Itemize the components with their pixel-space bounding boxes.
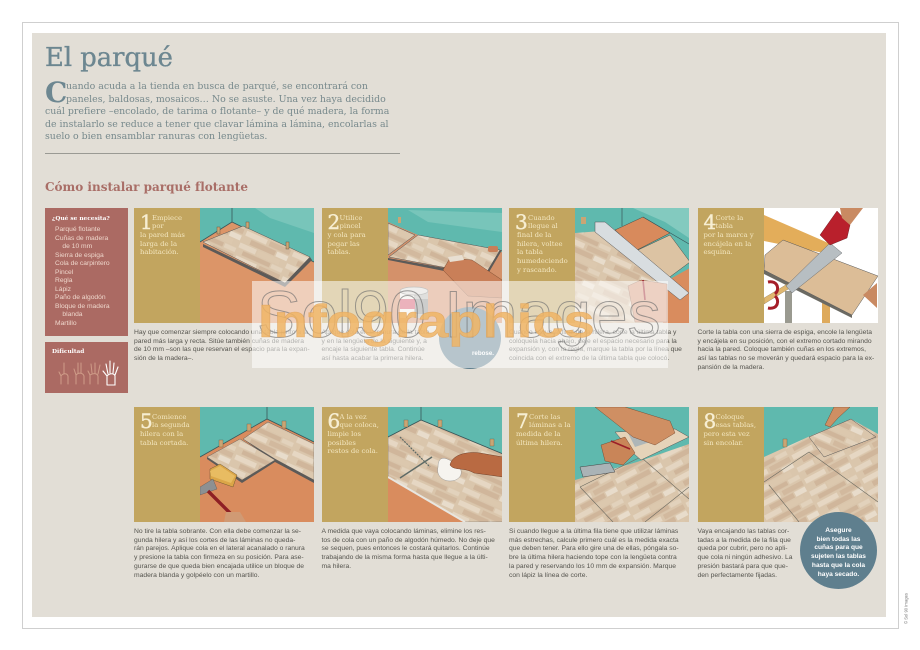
step 5 title	[140, 409, 190, 447]
intro text: uando acuda a la tienda en busca de parqué, se encontrará con paneles, baldosas, mosaicos… No se asuste. Una vez haya decidido cuál prefiere –encolado, de tarima o flotante– y de qué madera, la forma de instalarlo se reduce a tener que clavar lámina a lámina, encolarlas al suelo o bien ensamblar ranuras con lengüetas.	[45, 81, 389, 142]
step 6 title	[328, 409, 379, 455]
step 2 title: 2	[328, 210, 340, 234]
step 5 title: tabla cortada.	[140, 439, 188, 447]
step 7 title: medida de la	[516, 430, 561, 438]
step 3 title	[515, 210, 568, 274]
step 3 title: y rascando.	[517, 266, 557, 274]
step 6 text: A medida que vaya colocando láminas, elimine los res- tos de cola con un paño de algodón húmedo. No deje que se sequen, pues entonces le costará quitarlos. Continúe trabajando de la misma forma hasta que llegue a la últi- ma hilera.	[322, 528, 495, 570]
step 4 title: tabla	[716, 222, 733, 230]
callout: wedge tip	[800, 512, 877, 589]
step 1 title: habitación.	[140, 248, 179, 256]
step 6 title: limpie los	[328, 430, 361, 438]
step 8 title: 8	[704, 409, 716, 433]
illustration: fitting the cut boards	[764, 407, 878, 522]
step 4 title: encájela en la	[704, 240, 751, 248]
watermark	[252, 281, 668, 368]
step 1 text: Hay que comenzar siempre colocando una tabla junto a la pared más larga y recta. Sitúe también cuñas de madera de 10 mm –son las que reservan el espacio para la expan- sión de la madera–.	[134, 329, 310, 362]
step 1 title: Empiece	[152, 214, 182, 222]
step 4 title: Corte la	[716, 214, 743, 222]
step 8	[698, 407, 878, 579]
section heading: Cómo instalar parqué flotante	[45, 180, 248, 194]
step 2 text: Aplique cola en la ranura de la tabla y en la lengüeta de la siguiente y, a encaje la siguiente tabla. Continúe así hasta acabar la primera hilera.	[322, 329, 429, 362]
step 1 title: larga de la	[140, 240, 177, 248]
step 3 title: final de la	[517, 231, 551, 239]
callout: wedge tip: Asegure bien todas las cuñas para que sujeten las tablas hasta que la cola haya secado.	[811, 527, 866, 578]
step 2 title: y cola para	[328, 231, 366, 239]
illustration: gluing boards with brush and paint can	[388, 208, 502, 323]
step 4 title: esquina.	[704, 248, 733, 256]
step 6 title: que coloca,	[340, 421, 379, 429]
step 6	[322, 407, 502, 570]
illustration: first board against the wall	[200, 208, 314, 323]
watermark orange text: Infographics	[258, 295, 595, 347]
illustration: sawing the board	[764, 208, 878, 323]
step 7 title	[516, 409, 571, 447]
step 4	[698, 208, 878, 371]
step 7 title: Corte las	[529, 413, 560, 421]
step 1 title: la pared más	[140, 231, 185, 239]
step 2 title: pincel	[340, 222, 361, 230]
materials heading: ¿Qué se necesita?	[52, 216, 110, 222]
step 1 title: por	[152, 222, 164, 230]
step 3 title: la tabla	[517, 248, 543, 256]
step 3 title: Cuando	[528, 214, 555, 222]
step 8 title: esas tablas,	[716, 421, 756, 429]
step 7 text: Si cuando llegue a la última fila tiene que utilizar láminas más estrechas, calcule primero cuál es la medida exacta que deben tener. Para ello gire una de ellas, póngala so- bre la última hilera haciendo tope con la lengüeta contra la pared y reservando los 10 mm de expansión. Marque con lápiz la línea de corte.	[509, 528, 679, 579]
illustration: hammering the second row	[200, 407, 314, 522]
callout: glue tip: rebose.	[472, 350, 494, 357]
step 1 title	[140, 210, 185, 256]
step 6 title: restos de cola.	[328, 447, 378, 455]
step 2	[322, 208, 502, 369]
step 5 text: No tire la tabla sobrante. Con ella debe comenzar la se- gunda hilera y así los cortes de las láminas no queda- rán parejos. Aplique cola en el lateral acanalado o ranura y presione la tabla con firmeza en su posición. Para ase- gurarse de que queda bien encajada utilice un bloque de madera blanda y golpéelo con un martillo.	[134, 528, 305, 579]
step 1	[134, 208, 314, 362]
step 6 title: 6	[328, 409, 340, 433]
illustration: marking the last board with a ruler	[575, 208, 689, 323]
paint can	[400, 287, 428, 318]
step 8 text: Vaya encajando las tablas cor- tadas a la medida de la fila que queda por cubrir, pero no apli- que cola ni ningún adhesivo. La presión bastará para que que- den perfectamente fijadas.	[698, 528, 792, 579]
step 3 title: hilera, voltee	[517, 240, 563, 248]
step 3 title: humedeciendo	[517, 257, 568, 265]
step 7 title: láminas a la	[529, 421, 571, 429]
step 4 title	[704, 210, 754, 256]
step 8 title: Coloque	[716, 413, 744, 421]
step 4 title: 4	[704, 210, 716, 234]
title: El parqué	[45, 42, 173, 72]
illustration: marking the last row	[575, 407, 689, 522]
step 1 title: 1	[140, 210, 153, 234]
panel: difficulty	[45, 342, 128, 393]
illustration: wiping glue with a cloth	[388, 407, 502, 522]
step 2 title: Utilice	[340, 214, 362, 222]
step 7 title: última hilera.	[516, 439, 563, 447]
step 7	[509, 407, 689, 579]
step 8 title	[704, 409, 756, 447]
intro text: C	[45, 76, 67, 109]
image credit: © Sol 90 Images	[904, 593, 908, 624]
step 8 title: sin encolar.	[704, 439, 743, 447]
step 5	[134, 407, 314, 579]
step 2 title: pegar las	[328, 240, 360, 248]
step 5 title: hilera con la	[140, 430, 183, 438]
step 4 title: por la marca y	[704, 231, 754, 239]
materials list: Parqué flotante Cuñas de madera de 10 mm Sierra de espiga Cola de carpintero Pincel Regla Lápiz Paño de algodón Bloque de madera blanda Martillo	[55, 226, 110, 327]
step 7 title: 7	[516, 409, 529, 433]
callout: glue tip	[439, 307, 501, 369]
step 3 title: 3	[515, 210, 528, 234]
panel: materials needed	[45, 208, 128, 336]
step 4 text: Corte la tabla con una sierra de espiga, encole la lengüeta y encájela en su posición, con el extremo cortado mirando hacia la pared. Coloque también cuñas en los extremos, así las tablas no se moverán y quedará espacio para la ex- pansión de la madera.	[698, 329, 874, 371]
step 6 title: A la vez	[340, 413, 367, 421]
step 2 title	[328, 210, 366, 256]
icon: four difficulty hands	[58, 360, 118, 386]
step 3 text: Cuando llegue al final de la hilera, corte la última tabla y colóquela hacia abajo, deje el espacio necesario para la expansión y, con la regla, marque la tabla por la línea que coincida con el extremo de la última tabla que colocó.	[509, 329, 682, 362]
step 6 title: posibles	[328, 439, 356, 447]
step 2 title: tablas.	[328, 248, 351, 256]
step 5 title: la segunda	[152, 421, 190, 429]
step 3	[509, 208, 689, 362]
step 8 title: pero esta vez	[704, 430, 750, 438]
step 5 title: 5	[140, 409, 153, 433]
step 3 title: llegue al	[528, 222, 558, 230]
step 5 title: Comience	[152, 413, 186, 421]
difficulty heading: Dificultad	[52, 349, 84, 355]
